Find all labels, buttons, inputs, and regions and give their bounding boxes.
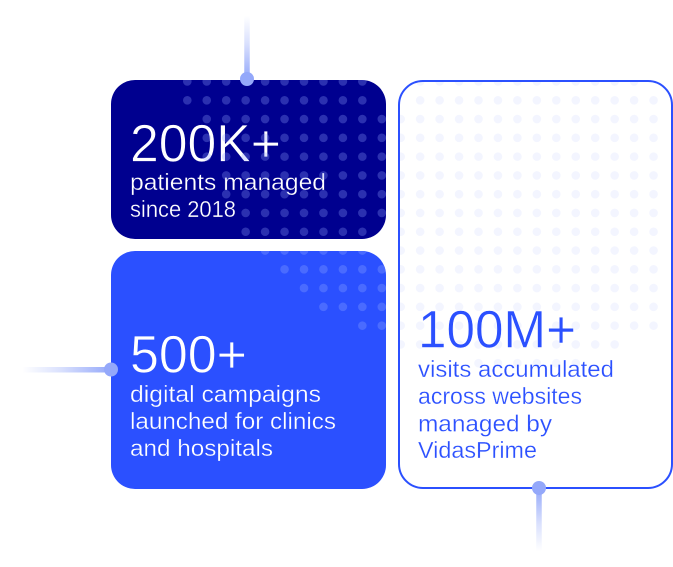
description: visits accumulated across websites managed by VidasPrime: visits accumulated [418, 356, 614, 382]
stat: 500+: 500+ [130, 326, 247, 384]
description: visits accumulated across websites managed by VidasPrime: VidasPrime [418, 437, 537, 463]
connector dot: bottom [532, 481, 546, 495]
dot pattern: outlined panel [401, 82, 654, 363]
connector dot: left [104, 362, 118, 376]
panel: digital campaigns [111, 251, 386, 489]
connector dot: top [240, 72, 254, 86]
dot pattern: blue panel [265, 251, 382, 326]
description: digital campaigns launched for clinics and hospitals: launched for clinics [130, 408, 336, 434]
description: visits accumulated across websites managed by VidasPrime: managed by [418, 410, 553, 436]
description: digital campaigns launched for clinics and hospitals [130, 381, 336, 461]
description: digital campaigns launched for clinics and hospitals: digital campaigns [130, 381, 321, 407]
description: patients managed since 2018: patients managed [130, 169, 326, 195]
panel: website visits [399, 81, 673, 488]
description: visits accumulated across websites managed by VidasPrime: across websites [418, 383, 582, 409]
description: patients managed since 2018: since 2018 [130, 196, 236, 222]
stat: 100M+: 100M+ [418, 300, 576, 360]
connector line: top [244, 0, 250, 79]
description: patients managed since 2018 [130, 169, 326, 222]
description: digital campaigns launched for clinics and hospitals: and hospitals [130, 435, 273, 461]
connector line: bottom [536, 488, 542, 567]
connector line: left [0, 367, 111, 372]
dot pattern: navy panel [187, 82, 382, 232]
panel: patients managed [111, 80, 386, 239]
stat: 200K+: 200K+ [130, 114, 281, 174]
description: visits accumulated across websites managed by VidasPrime [418, 356, 614, 463]
